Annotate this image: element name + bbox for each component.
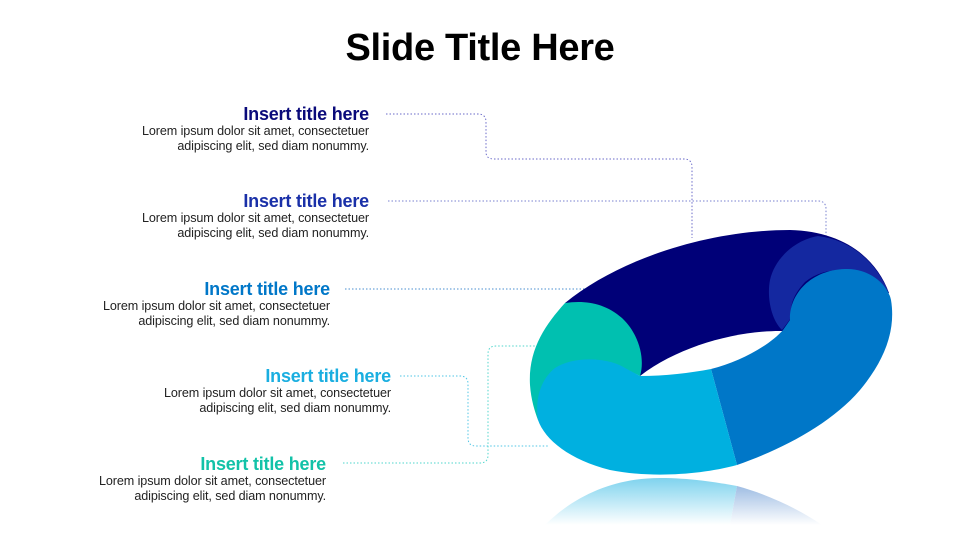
segment: light blue (537, 359, 737, 475)
donut reflection (545, 478, 822, 525)
text block 1: adipiscing elit, sed diam nonummy. (177, 139, 369, 153)
text block 2: Lorem ipsum dolor sit amet, consectetuer (142, 211, 369, 225)
text block 1: Lorem ipsum dolor sit amet, consectetuer (142, 124, 369, 138)
hole (640, 331, 784, 376)
donut (530, 230, 892, 475)
text block 4: Insert title here (265, 366, 391, 386)
title: Slide Title Here (345, 27, 615, 69)
segment: royal blue cap (769, 236, 889, 330)
text block 3: Lorem ipsum dolor sit amet, consectetuer (103, 299, 330, 313)
connectors (343, 114, 826, 463)
text block 5 (99, 454, 326, 503)
text block 5: Lorem ipsum dolor sit amet, consectetuer (99, 474, 326, 488)
text block 1: Insert title here (243, 104, 369, 124)
segment: mid blue (711, 269, 892, 465)
text block 4 (164, 366, 391, 415)
segment: teal (530, 302, 642, 420)
text block 3: Insert title here (204, 279, 330, 299)
text block 5: Insert title here (200, 454, 326, 474)
text block 3: adipiscing elit, sed diam nonummy. (138, 314, 330, 328)
text block 2: adipiscing elit, sed diam nonummy. (177, 226, 369, 240)
text block 5: adipiscing elit, sed diam nonummy. (134, 489, 326, 503)
text block 2: Insert title here (243, 191, 369, 211)
text block 2 (142, 191, 369, 240)
segment: navy back (565, 230, 889, 376)
text block 4: Lorem ipsum dolor sit amet, consectetuer (164, 386, 391, 400)
text block 4: adipiscing elit, sed diam nonummy. (199, 401, 391, 415)
text block 3 (103, 279, 330, 328)
text block 1 (142, 104, 369, 153)
